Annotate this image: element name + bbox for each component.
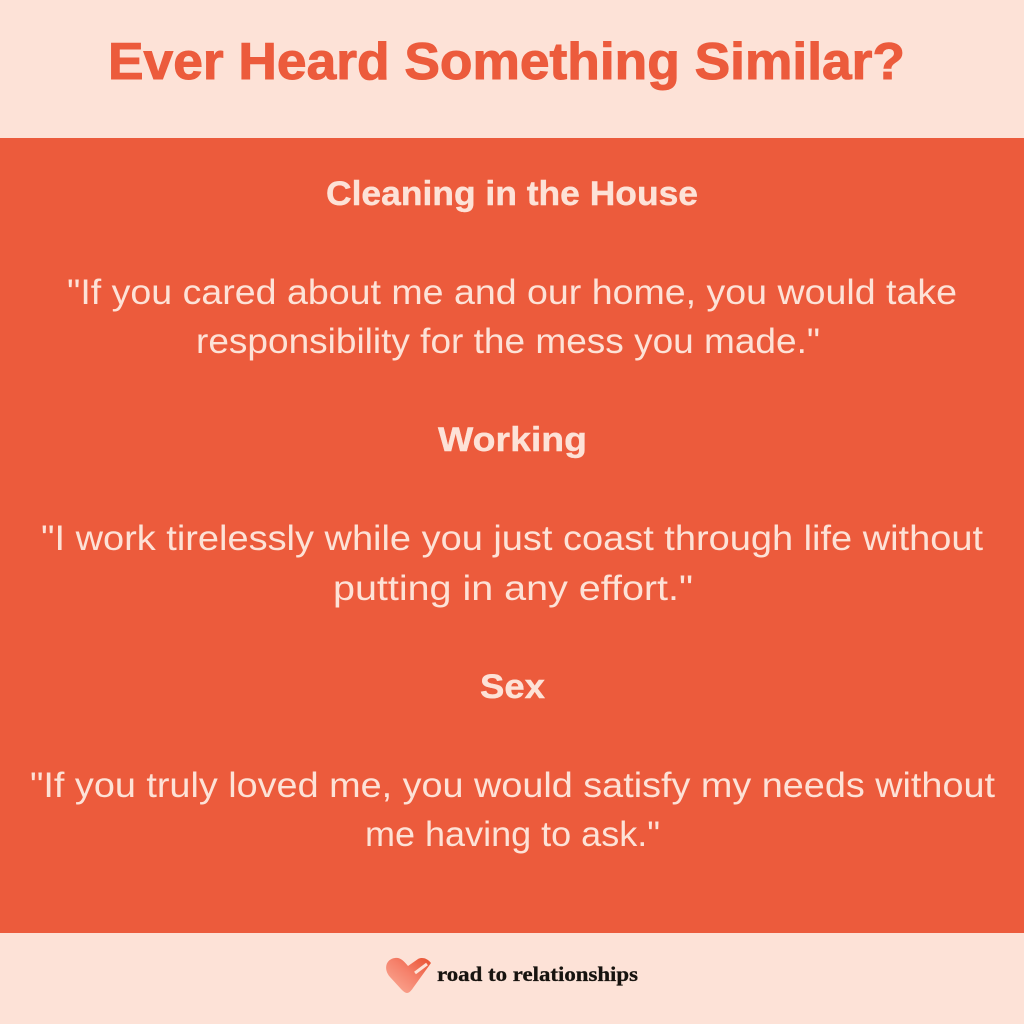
heading: sex: Sex	[480, 668, 545, 706]
header band	[0, 0, 1024, 138]
quote: sex: "If you truly loved me, you would satisfy my needs without	[30, 766, 995, 805]
heading: cleaning in the house: Cleaning in the House	[326, 175, 698, 213]
quote: cleaning: "If you cared about me and our home, you would take	[67, 273, 957, 312]
heading: working: Working	[438, 421, 587, 459]
quote: cleaning	[67, 273, 957, 361]
footer logo	[386, 958, 638, 993]
section: sex	[30, 668, 995, 854]
quote: working: "I work tirelessly while you just coast through life without	[41, 519, 983, 558]
footer band	[0, 933, 1024, 1024]
brand name: road to relationships	[437, 962, 638, 986]
quote: sex	[30, 766, 995, 854]
main panel	[0, 138, 1024, 933]
quote: cleaning: responsibility for the mess you made."	[196, 322, 820, 361]
quote: working: putting in any effort."	[333, 569, 693, 608]
section: cleaning in the house	[67, 175, 957, 361]
icon: heart with check	[386, 958, 431, 993]
title: Ever Heard Something Similar?	[108, 33, 905, 91]
quote: sex: me having to ask."	[365, 815, 660, 854]
quote: working	[41, 519, 983, 608]
section: working	[41, 421, 983, 608]
